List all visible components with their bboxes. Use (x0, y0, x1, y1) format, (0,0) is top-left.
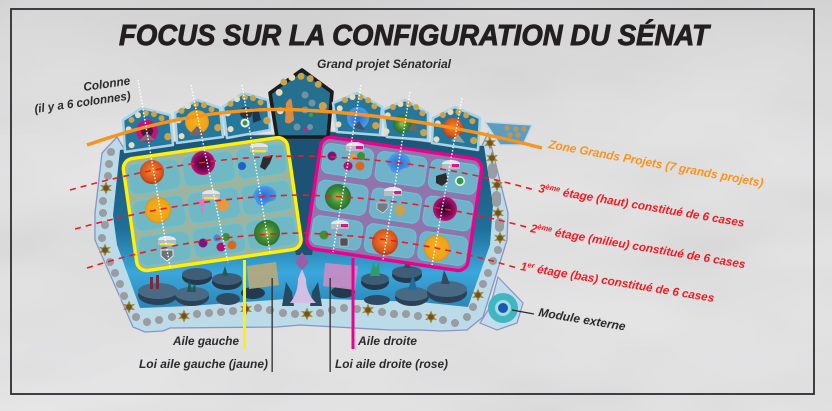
title: FOCUS SUR LA CONFIGURATION DU SÉNAT (119, 19, 711, 52)
label: third floor: 3 (537, 182, 546, 196)
rail studs (98, 136, 506, 327)
right wing cells (310, 143, 479, 266)
project tiles (123, 70, 532, 152)
pedestals (138, 258, 467, 306)
left wing icons (140, 143, 280, 261)
tile 1 (123, 107, 173, 152)
external module (480, 277, 523, 330)
label: left wing: Aile gauche (172, 334, 239, 348)
label: left wing law: Loi aile gauche (jaune) (139, 357, 268, 371)
cell icons (140, 142, 465, 261)
label: column (33, 74, 131, 116)
board rail (95, 132, 508, 332)
red dashed floor lines (70, 156, 535, 268)
right wing icons (320, 142, 465, 261)
label: right wing law: Loi aile droite (rose) (335, 357, 448, 371)
label: external module: Module externe (538, 305, 627, 334)
law card left (247, 262, 279, 289)
label: second floor: étage (milieu) constitué de 6 cases (551, 226, 747, 271)
leader: external module (512, 310, 534, 314)
label: senatorial project: Grand projet Sénatorial (317, 57, 452, 71)
central senatorial project (270, 70, 332, 137)
leader: right wing (352, 258, 354, 349)
label: grand projects zone: Zone Grands Projets (7 grands projets) (547, 137, 764, 190)
small tile (485, 122, 532, 145)
board interior (113, 132, 493, 308)
orange line: grand projects zone (87, 109, 542, 148)
panel: right wing (pink) (305, 136, 483, 272)
leader: right wing law (330, 278, 331, 372)
law card right (323, 263, 358, 290)
label: first floor: 1 (520, 260, 528, 274)
leader: left wing law (272, 278, 273, 372)
tile 3 (223, 91, 271, 138)
tile 4 (333, 91, 383, 135)
label: second floor: 2 (529, 222, 538, 236)
central dark strip (276, 135, 330, 255)
tile 6 (432, 106, 481, 150)
label: column: Colonne (82, 74, 131, 94)
label: second floor: ème (537, 222, 553, 234)
label: third floor: étage (haut) constitué de 6 cases (559, 186, 746, 230)
tile 5 (382, 98, 431, 140)
white dotted column lines (138, 80, 462, 267)
label: right wing: Aile droite (357, 334, 417, 348)
label: column: (il y a 6 colonnes) (33, 89, 131, 116)
senate statue (282, 252, 322, 306)
label: first floor: er (527, 260, 536, 270)
leader: left wing (243, 260, 246, 349)
label: third floor: ème (545, 182, 561, 194)
game board (95, 132, 508, 332)
tile 2 (174, 98, 223, 143)
left wing cells (127, 143, 298, 266)
panel: left wing (yellow) (122, 136, 302, 272)
label: first floor: étage (bas) constitué de 6 cases (533, 262, 716, 305)
